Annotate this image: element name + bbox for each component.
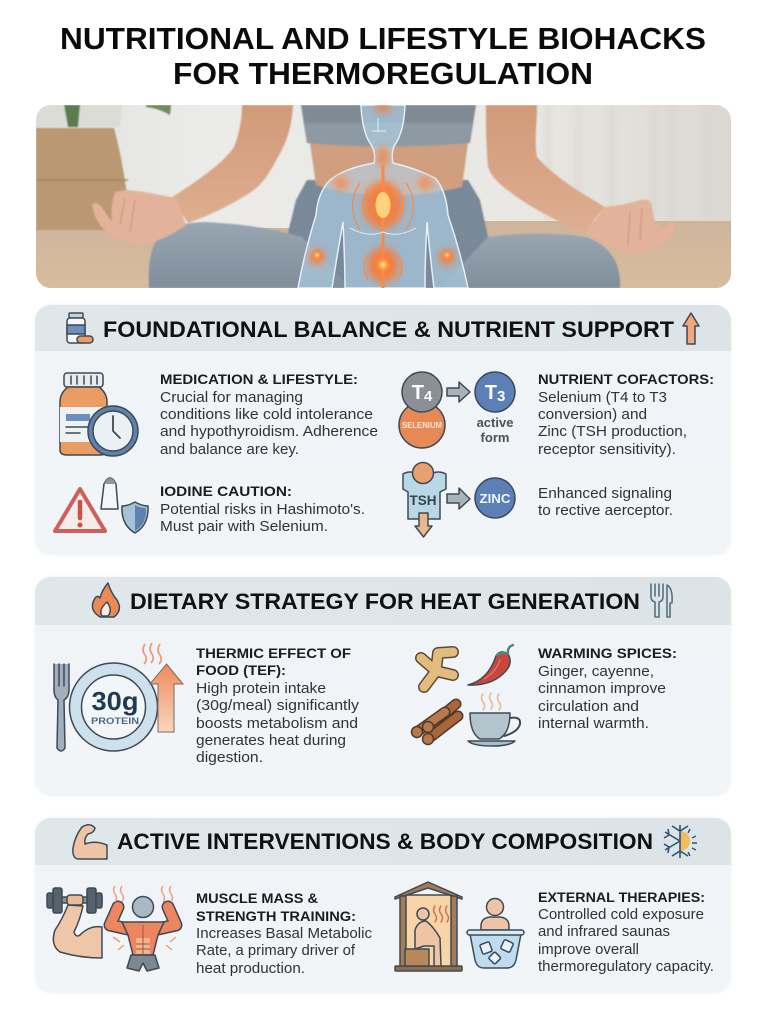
- text block: thermic effect of food: generates heat during: [196, 733, 346, 749]
- text block: muscle mass and strength training: [196, 891, 372, 977]
- icon: fork: [54, 664, 69, 751]
- diagram: T4 with selenium converts to T3: active: [477, 415, 513, 430]
- diagram: TSH to zinc: ZINC: [480, 492, 510, 506]
- text block: warming spices: internal warmth.: [538, 716, 649, 732]
- text block: enhanced signaling: Enhanced signaling: [538, 486, 672, 502]
- diagram: T4 with selenium converts to T3: SELENIUM: [402, 421, 442, 430]
- text block: external therapies: [538, 890, 714, 975]
- icon: snowflake and sun: [664, 825, 697, 858]
- text block: external therapies: and infrared saunas: [538, 924, 670, 940]
- text block: iodine caution: Potential risks in Hashimoto's.: [160, 502, 365, 518]
- glowing body overlay: [298, 102, 468, 288]
- icon: sauna cabin: [395, 882, 462, 971]
- icon: cinnamon sticks: [412, 704, 458, 744]
- text block: nutrient cofactors: Zinc (TSH production,: [538, 424, 687, 440]
- panel: active interventions and body composition: [35, 818, 731, 993]
- diagram: T4 with selenium converts to T3: 4: [424, 388, 433, 405]
- icon: fork and knife: [651, 584, 672, 617]
- top: [300, 105, 477, 142]
- text block: muscle mass and strength training: Rate, a primary driver of: [196, 943, 356, 959]
- icon: ice bath: [467, 898, 524, 968]
- diagram: T4 with selenium converts to T3: T: [412, 382, 424, 404]
- icon: flexed bicep: [73, 825, 107, 859]
- text block: muscle mass and strength training: heat production.: [196, 961, 305, 977]
- text block: enhanced signaling: to rective aerceptor.: [538, 503, 673, 519]
- legs: [149, 222, 350, 288]
- text block: muscle mass and strength training: STRENGTH TRAINING:: [196, 909, 356, 925]
- text block: external therapies: thermoregulatory capacity.: [538, 959, 714, 975]
- diagram: T4 with selenium converts to T3: T: [485, 382, 497, 404]
- text block: medication and lifestyle: and hypothyroidism. Adherence: [160, 424, 378, 440]
- title: FOR THERMOREGULATION: [173, 57, 593, 91]
- text block: thermic effect of food: (30g/meal) significantly: [196, 698, 360, 714]
- icon: ginger: [421, 652, 453, 687]
- text block: thermic effect of food: FOOD (TEF):: [196, 663, 286, 679]
- heading: active interventions: ACTIVE INTERVENTIONS & BODY COMPOSITION: [117, 829, 653, 854]
- text block: external therapies: Controlled cold exposure: [538, 907, 704, 923]
- hands: [92, 190, 186, 244]
- icon: chilli pepper: [468, 645, 513, 685]
- text block: thermic effect of food: boosts metabolism and: [196, 716, 358, 732]
- text block: external therapies: EXTERNAL THERAPIES:: [538, 890, 705, 906]
- text block: external therapies: improve overall: [538, 942, 639, 958]
- diagram: T4 with selenium converts to T3: form: [481, 430, 509, 445]
- text block: iodine caution: IODINE CAUTION:: [160, 484, 292, 500]
- text block: warming spices: WARMING SPICES:: [538, 646, 677, 662]
- text block: thermic effect of food: [196, 646, 360, 766]
- icon: protein plate: PROTEIN: [91, 716, 139, 727]
- text block: warming spices: circulation and: [538, 699, 639, 715]
- text block: medication and lifestyle: Crucial for managing: [160, 390, 303, 406]
- text block: muscle mass and strength training: MUSCLE MASS &: [196, 891, 318, 907]
- icon: muscular figure: [110, 886, 176, 971]
- text block: thermic effect of food: digestion.: [196, 750, 263, 766]
- text block: iodine caution: [160, 484, 365, 535]
- title: NUTRITIONAL AND LIFESTYLE BIOHACKS: [60, 22, 706, 56]
- icon: medication bottle and clock: [60, 373, 138, 456]
- text block: warming spices: cinnamon improve: [538, 681, 666, 697]
- icon: warning triangle, salt shaker and shield: [55, 478, 148, 533]
- text block: thermic effect of food: THERMIC EFFECT OF: [196, 646, 351, 662]
- icon: up arrow: [683, 313, 699, 344]
- text block: thermic effect of food: High protein intake: [196, 681, 326, 697]
- icon: pill bottle: [67, 313, 93, 343]
- text block: warming spices: [538, 646, 677, 732]
- text block: medication and lifestyle: and balance are key.: [160, 442, 299, 458]
- hero image: meditating figure with glowing body overlay: [36, 102, 731, 288]
- heading: foundational balance: FOUNDATIONAL BALANCE & NUTRIENT SUPPORT: [103, 317, 674, 342]
- icon: flame: [92, 583, 119, 617]
- icon: protein plate: 30g: [92, 686, 138, 716]
- diagram: T4 with selenium converts to T3: 3: [497, 388, 505, 405]
- text block: nutrient cofactors: NUTRIENT COFACTORS:: [538, 372, 714, 388]
- text block: medication and lifestyle: MEDICATION & LIFESTYLE:: [160, 372, 358, 388]
- text block: medication and lifestyle: conditions like cold intolerance: [160, 407, 373, 423]
- diagram: TSH to zinc: TSH: [410, 493, 436, 508]
- icon: rising heat arrow: [143, 643, 183, 732]
- diagram: TSH to zinc: [403, 462, 515, 537]
- text block: nutrient cofactors: Selenium (T4 to T3: [538, 390, 667, 406]
- text block: nutrient cofactors: receptor sensitivity).: [538, 442, 676, 458]
- waist and leggings: [288, 180, 488, 288]
- diagram: T4 with selenium converts to T3: [399, 372, 515, 448]
- panel: foundational balance and nutrient support: [35, 305, 731, 555]
- arms: [171, 105, 293, 223]
- icon: protein plate: [70, 663, 158, 751]
- text block: medication and lifestyle: [160, 372, 378, 458]
- heading: dietary strategy: DIETARY STRATEGY FOR HEAT GENERATION: [130, 589, 640, 614]
- title: [60, 22, 706, 91]
- text block: warming spices: Ginger, cayenne,: [538, 664, 654, 680]
- icon: tea cup: [468, 693, 520, 746]
- icon: arm lifting dumbbell: [47, 888, 102, 958]
- panel: dietary strategy for heat generation: [35, 577, 731, 796]
- text block: enhanced signaling: [538, 486, 673, 519]
- text block: muscle mass and strength training: Increases Basal Metabolic: [196, 926, 372, 942]
- text block: nutrient cofactors: [538, 372, 714, 458]
- text block: nutrient cofactors: conversion) and: [538, 407, 647, 423]
- text block: iodine caution: Must pair with Selenium.: [160, 519, 328, 535]
